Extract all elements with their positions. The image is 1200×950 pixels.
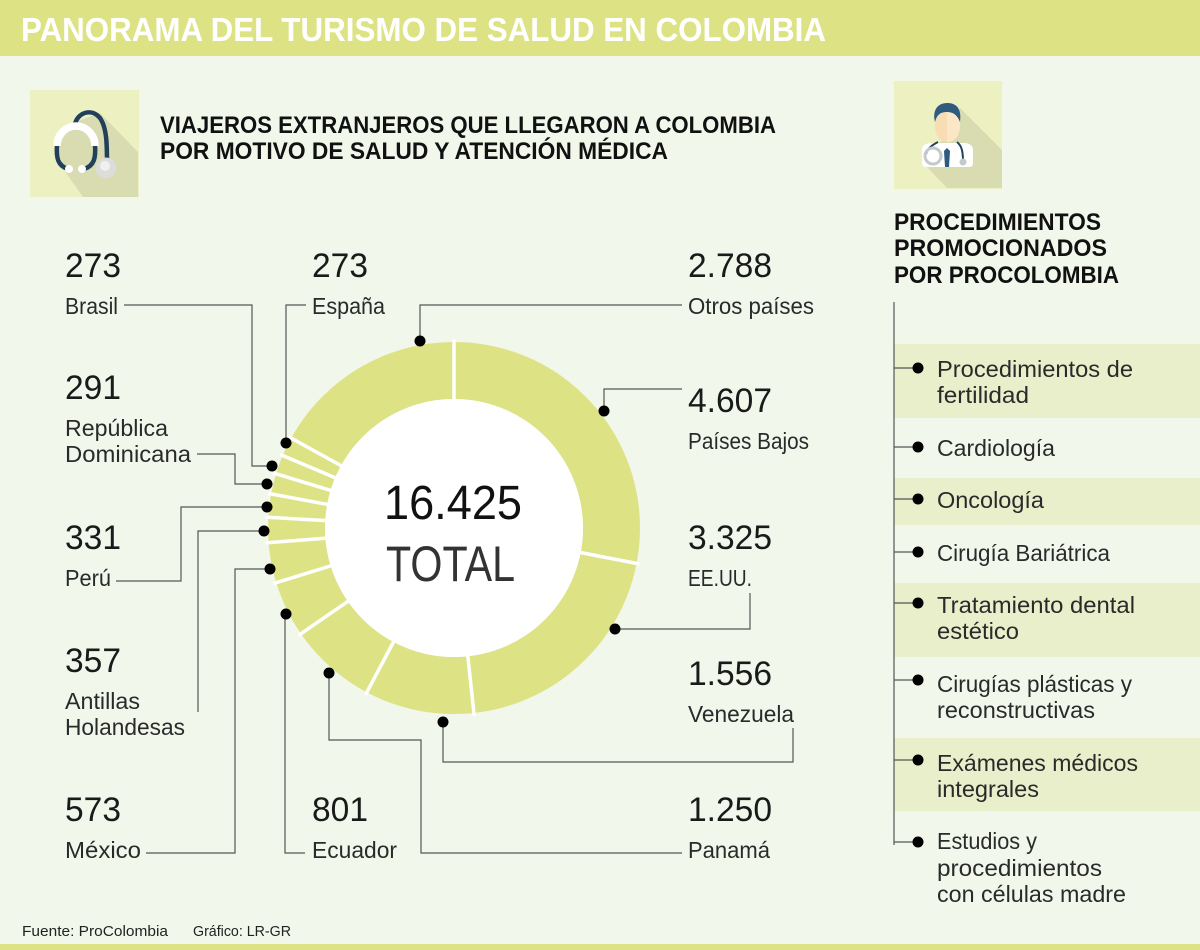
label: Perú: Perú xyxy=(65,565,111,591)
item: cirugías plásticas xyxy=(894,671,1132,723)
item: células madre: Estudios y xyxy=(937,828,1037,854)
label: México xyxy=(65,791,141,863)
donut total xyxy=(384,477,522,592)
item: células madre xyxy=(894,828,1126,907)
item: cirugía bariátrica: Cirugía Bariátrica xyxy=(937,540,1110,566)
source note: Fuente: ProColombia xyxy=(22,923,169,940)
item: exámenes médicos: integrales xyxy=(937,776,1039,802)
label: República Dominicana xyxy=(65,369,191,467)
heading: procedimientos: PROCEDIMIENTOS xyxy=(894,209,1101,236)
item: células madre: procedimientos xyxy=(937,855,1102,881)
leader: Brasil xyxy=(124,305,278,472)
label: República Dominicana: 291 xyxy=(65,369,121,407)
item: tratamiento dental: estético xyxy=(937,618,1019,644)
item: cirugías plásticas: reconstructivas xyxy=(937,697,1095,723)
label: Antillas Holandesas: Antillas xyxy=(65,688,140,714)
leader: Otros países xyxy=(414,305,682,346)
item: oncología xyxy=(894,487,1044,513)
label: Países Bajos xyxy=(688,382,809,454)
label: Otros países xyxy=(688,247,814,319)
icon: doctor xyxy=(894,81,1002,189)
label: Brasil: Brasil xyxy=(65,293,118,319)
label: Países Bajos: 4.607 xyxy=(688,382,772,420)
label: Perú: 331 xyxy=(65,519,121,557)
leader: Perú xyxy=(116,502,272,581)
label: Otros países: 2.788 xyxy=(688,247,772,285)
label: España xyxy=(312,247,385,319)
leader: EE.UU. xyxy=(610,593,750,634)
heading: viajeros extranjeros: POR MOTIVO DE SALUD Y ATENCIÓN MÉDICA xyxy=(160,137,668,165)
leader: Venezuela xyxy=(438,716,793,762)
title xyxy=(0,0,1200,56)
label: EE.UU. xyxy=(688,519,772,591)
item: oncología: Oncología xyxy=(937,487,1044,513)
leader: Panamá xyxy=(324,668,682,853)
title: PANORAMA DEL TURISMO DE SALUD EN COLOMBIA xyxy=(21,11,826,48)
label: Panamá: 1.250 xyxy=(688,791,772,829)
label: Antillas Holandesas: Holandesas xyxy=(65,714,185,740)
procedures list xyxy=(894,302,1200,907)
item: exámenes médicos xyxy=(894,750,1138,802)
label: Ecuador: 801 xyxy=(312,791,368,829)
label: Ecuador xyxy=(312,791,397,863)
item: tratamiento dental xyxy=(894,592,1135,644)
donut total: TOTAL xyxy=(386,536,515,592)
label: Perú xyxy=(65,519,121,591)
item: tratamiento dental: Tratamiento dental xyxy=(937,592,1135,618)
label: España: 273 xyxy=(312,247,368,285)
leader: Países Bajos xyxy=(598,389,682,416)
label: Venezuela: 1.556 xyxy=(688,655,772,693)
item: fertilidad xyxy=(894,356,1133,408)
donut total: 16.425 xyxy=(384,477,522,530)
item: fertilidad: fertilidad xyxy=(937,382,1029,408)
heading: viajeros extranjeros xyxy=(160,112,776,165)
leader: República Dominicana xyxy=(197,454,272,490)
leader: México xyxy=(146,564,276,853)
source note xyxy=(22,923,291,940)
heading: procedimientos: POR PROCOLOMBIA xyxy=(894,262,1119,289)
label: EE.UU.: 3.325 xyxy=(688,519,772,557)
icon: stethoscope xyxy=(30,90,139,197)
label: España: España xyxy=(312,293,385,319)
leader: España xyxy=(280,305,306,448)
label: Otros países: Otros países xyxy=(688,293,814,319)
item: cirugías plásticas: Cirugías plásticas y xyxy=(937,671,1132,697)
heading: procedimientos xyxy=(894,209,1119,289)
label: Ecuador: Ecuador xyxy=(312,837,397,863)
label: Venezuela: Venezuela xyxy=(688,701,794,727)
label: México: México xyxy=(65,837,141,863)
label: Países Bajos: Países Bajos xyxy=(688,428,809,454)
item: fertilidad: Procedimientos de xyxy=(937,356,1133,382)
label: República Dominicana: Dominicana xyxy=(65,441,191,467)
label: Antillas Holandesas: 357 xyxy=(65,642,121,680)
item: células madre: con células madre xyxy=(937,881,1126,907)
label: Panamá xyxy=(688,791,772,863)
item: cardiología: Cardiología xyxy=(937,435,1055,461)
label: Brasil: 273 xyxy=(65,247,121,285)
source note: Gráfico: LR-GR xyxy=(193,923,291,940)
label: Panamá: Panamá xyxy=(688,837,770,863)
label: Antillas Holandesas xyxy=(65,642,185,740)
leader: Antillas Holandesas xyxy=(198,526,270,712)
label: Brasil xyxy=(65,247,121,319)
leader: Ecuador xyxy=(280,608,305,853)
label: Venezuela xyxy=(688,655,794,727)
label: República Dominicana: República xyxy=(65,415,168,441)
item: exámenes médicos: Exámenes médicos xyxy=(937,750,1138,776)
heading: viajeros extranjeros: VIAJEROS EXTRANJEROS QUE LLEGARON A COLOMBIA xyxy=(160,112,776,139)
bottom bar xyxy=(0,944,1200,950)
heading: procedimientos: PROMOCIONADOS xyxy=(894,235,1107,262)
label: México: 573 xyxy=(65,791,121,829)
donut chart xyxy=(265,339,640,716)
label: EE.UU.: EE.UU. xyxy=(688,565,752,591)
